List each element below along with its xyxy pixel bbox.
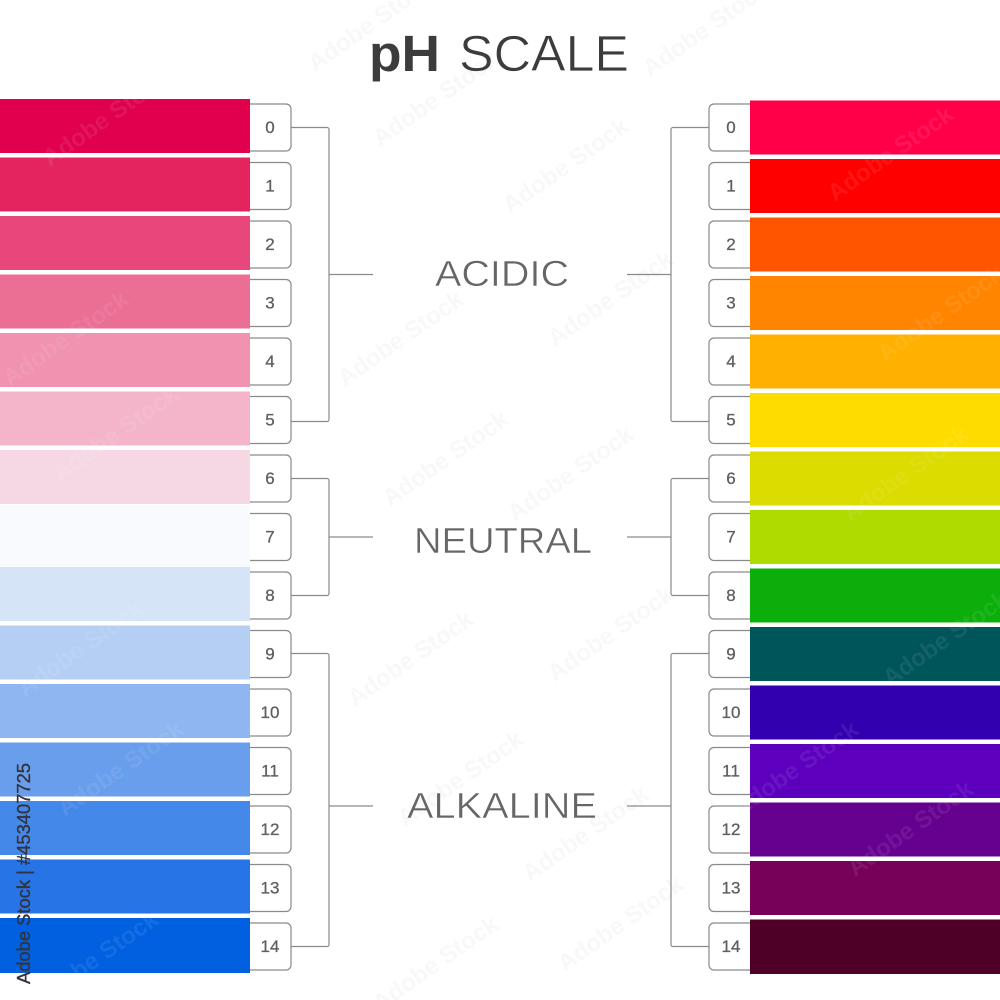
right number tabs: 10 xyxy=(722,703,740,722)
panel: left colour scale xyxy=(0,99,250,973)
watermark pattern: Adobe Stock xyxy=(53,715,189,822)
watermark pattern: Adobe Stock xyxy=(543,580,679,687)
left number tabs: 10 xyxy=(261,703,279,722)
watermark pattern: Adobe Stock xyxy=(378,405,514,512)
watermark pattern: Adobe Stock xyxy=(343,605,479,712)
watermark pattern: Adobe Stock xyxy=(38,65,174,172)
left number tabs: 1 xyxy=(265,177,275,196)
watermark pattern: Adobe Stock xyxy=(498,112,634,219)
left number tabs: 5 xyxy=(265,411,275,430)
right number tabs: 3 xyxy=(726,294,736,313)
watermark pattern: Adobe Stock xyxy=(838,420,974,527)
right number tabs: 5 xyxy=(726,411,736,430)
left number tabs: 8 xyxy=(265,586,275,605)
left number tabs xyxy=(250,104,291,970)
watermark pattern: Adobe Stock xyxy=(843,775,979,882)
right number tabs: 9 xyxy=(726,645,736,664)
left number tabs: 9 xyxy=(265,645,275,664)
watermark pattern: Adobe Stock xyxy=(543,245,679,352)
watermark pattern: Adobe Stock xyxy=(368,45,504,152)
watermark pattern: Adobe Stock xyxy=(518,780,654,887)
title: pH xyxy=(369,25,440,82)
right number tabs xyxy=(709,104,750,970)
title xyxy=(369,25,629,82)
watermark pattern: Adobe Stock xyxy=(48,380,184,487)
right bracket: acidic xyxy=(627,128,709,422)
right number tabs: 6 xyxy=(726,469,736,488)
watermark pattern: Adobe Stock xyxy=(503,420,639,527)
right number tabs: 7 xyxy=(726,528,736,547)
left number tabs: 4 xyxy=(265,352,275,371)
watermark pattern: Adobe Stock xyxy=(333,285,469,392)
right number tabs: 14 xyxy=(722,937,740,956)
watermark pattern: Adobe Stock xyxy=(393,725,529,832)
right bracket: neutral xyxy=(627,478,709,596)
right number tabs: 12 xyxy=(722,820,740,839)
left bracket: acidic xyxy=(291,128,373,422)
left number tabs: 6 xyxy=(265,469,275,488)
right number tabs: 4 xyxy=(726,352,736,371)
watermark pattern: Adobe Stock xyxy=(823,100,959,207)
left number tabs: 7 xyxy=(265,528,275,547)
watermark pattern: Adobe Stock xyxy=(553,870,689,977)
panel: right colour scale xyxy=(750,100,1000,974)
right number tabs: 13 xyxy=(722,879,740,898)
watermark pattern: Adobe Stock xyxy=(0,285,134,392)
left number tabs: 14 xyxy=(261,937,279,956)
label: acidic: ACIDIC xyxy=(435,253,569,294)
watermark pattern: Adobe Stock xyxy=(728,715,864,822)
right number tabs: 8 xyxy=(726,586,736,605)
right bracket: alkaline xyxy=(627,654,709,946)
label: neutral: NEUTRAL xyxy=(414,520,592,561)
left number tabs: 2 xyxy=(265,235,275,254)
left number tabs: 3 xyxy=(265,294,275,313)
left number tabs: 11 xyxy=(261,762,279,781)
left number tabs: 13 xyxy=(261,879,279,898)
left number tabs: 12 xyxy=(261,820,279,839)
label: alkaline: ALKALINE xyxy=(407,785,597,826)
left bracket: alkaline xyxy=(291,654,373,946)
right number tabs: 1 xyxy=(726,177,736,196)
watermark pattern: Adobe Stock xyxy=(13,595,149,702)
watermark id text: Adobe Stock | #453407725 xyxy=(14,763,34,984)
right number tabs: 11 xyxy=(722,762,740,781)
right number tabs: 2 xyxy=(726,235,736,254)
right number tabs: 0 xyxy=(726,118,736,137)
left number tabs: 0 xyxy=(265,118,275,137)
left bracket: neutral xyxy=(291,478,373,596)
title: SCALE xyxy=(459,25,629,82)
